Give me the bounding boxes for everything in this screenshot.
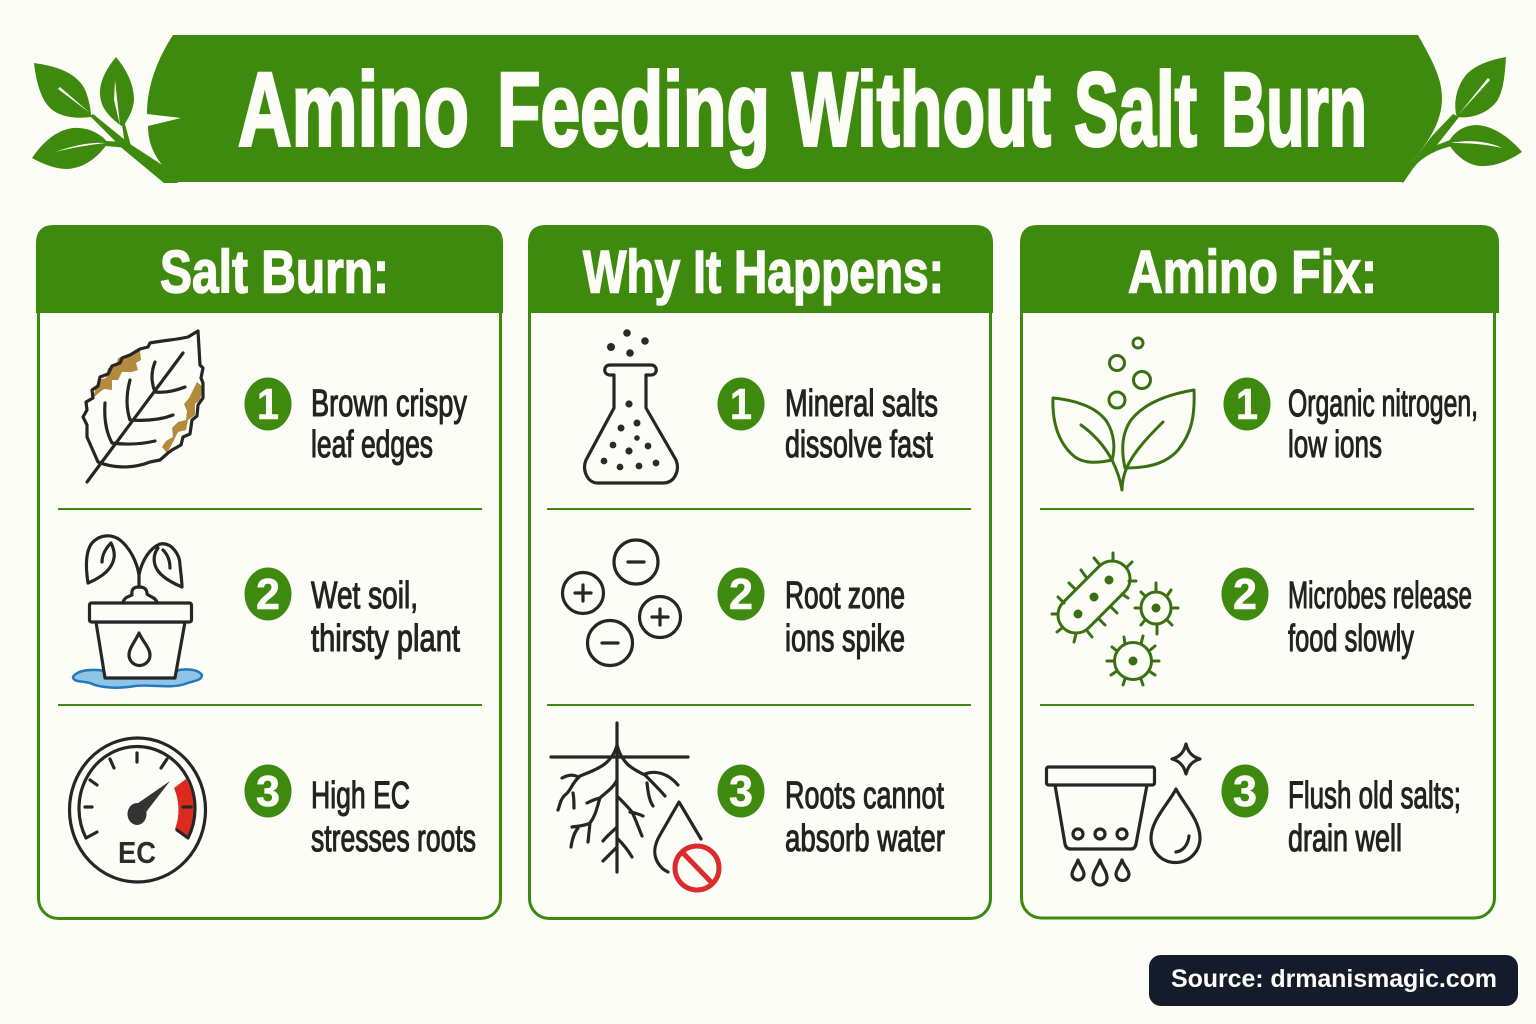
icon: wilting potted plant — [73, 536, 202, 688]
text: root zone ions spike: ions spike — [785, 618, 905, 660]
icon: sprout with bubbles — [1053, 338, 1194, 490]
text: mineral salts dissolve fast: Mineral salts — [785, 383, 938, 425]
text: flush old salts drain well — [1288, 775, 1461, 860]
step number 3 — [1222, 764, 1268, 818]
text: organic nitrogen low ions — [1288, 383, 1478, 466]
source badge: Source: drmanismagic.com — [1171, 965, 1497, 993]
icon: roots with blocked water — [551, 723, 719, 890]
icon: flushing pot and water drop — [1046, 744, 1200, 885]
text: organic nitrogen low ions: low ions — [1288, 424, 1382, 466]
text: brown crispy leaf edges — [311, 383, 467, 466]
step number 2 — [244, 568, 292, 620]
title text: Amino — [238, 52, 469, 168]
heading: amino fix: Amino Fix: — [1128, 238, 1377, 306]
step number 2: 2 — [1233, 570, 1257, 619]
step number 1 — [244, 378, 292, 430]
text: mineral salts dissolve fast — [785, 383, 938, 466]
panel: amino fix — [1020, 225, 1499, 918]
title text: Without — [792, 52, 1051, 168]
title text: Burn — [1221, 52, 1367, 168]
panel: why it happens — [528, 225, 993, 918]
step number 3: 3 — [256, 767, 280, 816]
text: high EC stresses roots — [311, 775, 476, 860]
step number 2 — [718, 568, 764, 620]
step number 3 — [244, 764, 292, 818]
icon: EC gauge: EC — [118, 835, 156, 870]
text: high EC stresses roots: stresses roots — [311, 818, 476, 860]
text: root zone ions spike: Root zone — [785, 575, 905, 617]
icon: burnt leaf — [83, 331, 203, 482]
heading: why it happens: Why It Happens: — [583, 238, 944, 306]
heading: salt burn: Salt Burn: — [160, 238, 389, 306]
step number 3 — [718, 764, 764, 818]
icon: flask with salts — [585, 329, 677, 483]
step number 1: 1 — [1236, 380, 1258, 429]
text: wet soil thirsty plant — [311, 575, 460, 660]
step number 3: 3 — [1233, 767, 1257, 816]
text: root zone ions spike — [785, 575, 905, 660]
text: mineral salts dissolve fast: dissolve fast — [785, 424, 933, 466]
icon: left leaf sprig — [32, 57, 178, 183]
text: wet soil thirsty plant: thirsty plant — [311, 618, 460, 660]
text: brown crispy leaf edges: leaf edges — [311, 424, 433, 466]
text: brown crispy leaf edges: Brown crispy — [311, 383, 467, 425]
text: high EC stresses roots: High EC — [311, 775, 410, 817]
icon: charged ions — [562, 540, 680, 666]
title banner — [147, 35, 1442, 182]
text: microbes release food slowly — [1288, 575, 1472, 660]
step number 1: 1 — [730, 380, 752, 429]
text: roots cannot absorb water — [785, 775, 945, 860]
icon: microbes — [1051, 553, 1178, 685]
source badge — [1149, 955, 1518, 1006]
text: flush old salts drain well: drain well — [1288, 818, 1402, 860]
text: microbes release food slowly: food slowly — [1288, 618, 1414, 660]
step number 2: 2 — [729, 570, 753, 619]
title text: Salt — [1074, 52, 1197, 168]
text: roots cannot absorb water: absorb water — [785, 818, 945, 860]
title text: Feeding — [497, 52, 770, 168]
text: wet soil thirsty plant: Wet soil, — [311, 575, 418, 617]
step number 1 — [718, 378, 764, 430]
icon: right leaf sprig — [1396, 57, 1522, 183]
step number 2: 2 — [256, 570, 280, 619]
panel: salt burn — [36, 225, 503, 918]
step number 1 — [1224, 378, 1270, 430]
step number 3: 3 — [729, 767, 753, 816]
step number 2 — [1222, 568, 1268, 620]
step number 1: 1 — [257, 380, 279, 429]
title text — [238, 52, 1367, 168]
icon: EC gauge — [70, 738, 206, 882]
text: roots cannot absorb water: Roots cannot — [785, 775, 944, 817]
text: flush old salts drain well: Flush old salts; — [1288, 775, 1461, 817]
